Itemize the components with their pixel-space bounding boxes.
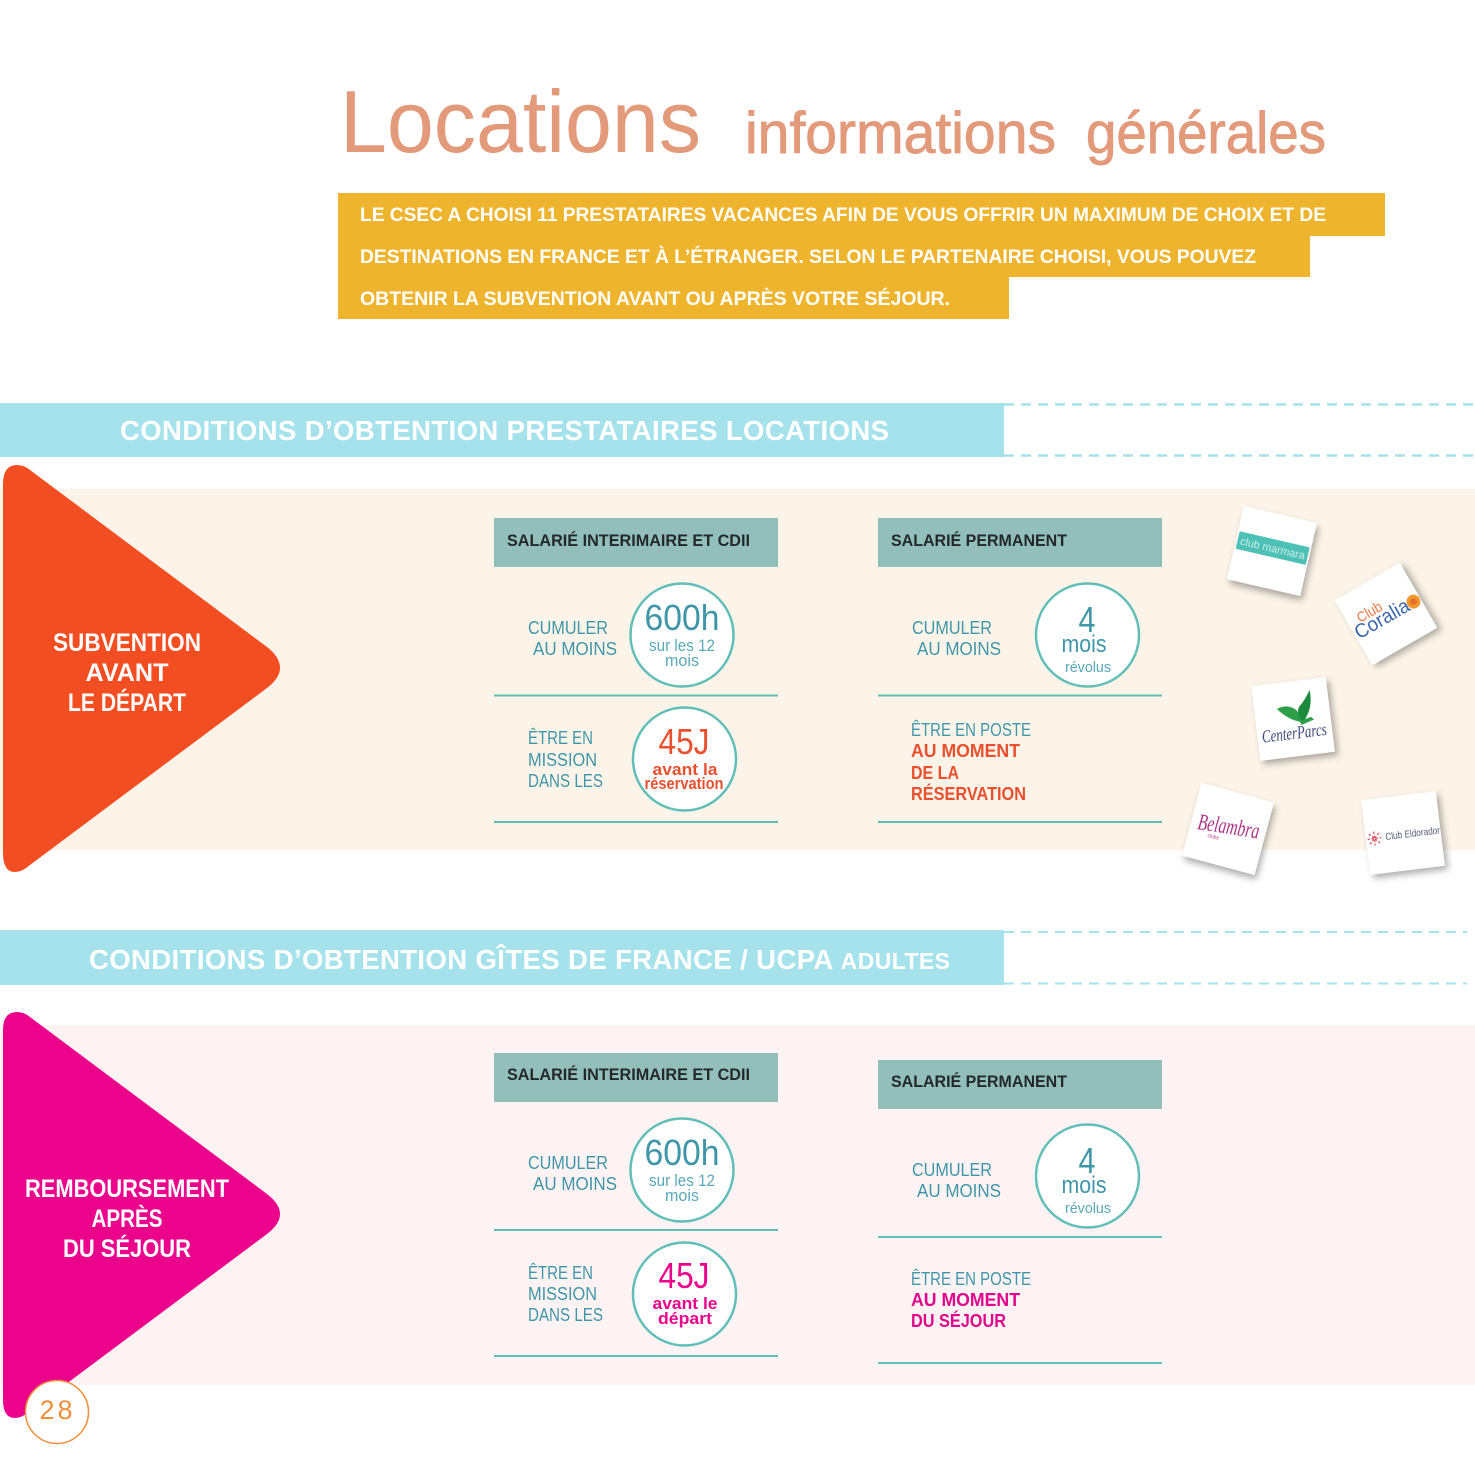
circle: 4 mois: révolus (1065, 1200, 1111, 1217)
circle: 600h (630, 584, 734, 686)
arrow: remboursement après du séjour: APRÈS (92, 1204, 162, 1233)
page number (26, 1380, 88, 1444)
column: salarié intérimaire et CDII (494, 1053, 778, 1356)
circle: 4 mois (1036, 584, 1139, 686)
circle: 45J: avant le (652, 1294, 718, 1313)
condition: cumuler (528, 618, 617, 659)
title: générales (1086, 101, 1326, 166)
column: salarié intérimaire et CDII (494, 518, 778, 822)
circle: 45J: 45J (658, 721, 710, 762)
arrow: remboursement après du séjour (3, 1012, 280, 1418)
circle: 45J: départ (658, 1309, 712, 1328)
logo card: club marmara (1227, 506, 1317, 596)
condition: poste (911, 1269, 1031, 1331)
page number: 28 (40, 1395, 72, 1425)
condition: poste: ÊTRE EN POSTE (911, 720, 1031, 740)
intro banner (338, 193, 1385, 319)
condition: mission: DANS LES (528, 771, 603, 791)
condition: mission: MISSION (528, 750, 597, 770)
condition: cumuler: AU MOINS (917, 1181, 1001, 1201)
condition: poste: AU MOMENT (911, 1290, 1020, 1310)
circle: 4 mois: révolus (1065, 659, 1111, 676)
condition: cumuler: CUMULER (912, 618, 992, 638)
condition: cumuler: AU MOINS (533, 1174, 617, 1194)
logo card: club coralia: Club (1354, 598, 1386, 627)
condition: poste: AU MOMENT (911, 741, 1020, 761)
condition: cumuler (912, 618, 1001, 659)
circle: 4 mois: mois (1062, 1172, 1106, 1199)
logo card: belambra: Belambra (1196, 809, 1261, 844)
column header: SALARIÉ INTERIMAIRE ET CDII (507, 531, 750, 550)
condition: cumuler (528, 1153, 617, 1194)
arrow: subvention avant le départ: SUBVENTION (53, 629, 201, 657)
condition: poste (911, 720, 1031, 804)
logo card: belambra (1182, 783, 1274, 875)
arrow: subvention avant le départ: LE DÉPART (68, 688, 186, 717)
column header: SALARIÉ INTERIMAIRE ET CDII (507, 1065, 750, 1084)
section heading: gîtes de france / ucpa: CONDITIONS D’OBTENTION GÎTES DE FRANCE / UCPA ADULTES (89, 944, 950, 975)
circle: 600h (630, 1118, 734, 1222)
condition: mission: ÊTRE EN (528, 728, 593, 748)
column: salarié permanent (878, 518, 1162, 822)
column header (494, 1053, 778, 1102)
column header (494, 518, 778, 567)
section heading: prestataires locations: CONDITIONS D’OBTENTION PRESTATAIRES LOCATIONS (120, 415, 889, 446)
arrow: subvention avant le départ: AVANT (86, 659, 168, 687)
column: salarié permanent (878, 1060, 1162, 1363)
panel: subvention avant le départ (0, 489, 1475, 850)
condition: poste: RÉSERVATION (911, 783, 1026, 804)
arrow: subvention avant le départ (3, 465, 280, 872)
logo card: center parcs: CenterParcs (1261, 719, 1328, 747)
circle: 4 mois: mois (1062, 631, 1106, 658)
condition: poste: DE LA (911, 763, 959, 783)
condition: cumuler: AU MOINS (917, 639, 1001, 659)
condition: mission: DANS LES (528, 1305, 603, 1325)
circle: 45J: avant la (652, 760, 718, 779)
circle: 600h: mois (665, 1186, 699, 1205)
title (340, 72, 1326, 171)
column header (878, 518, 1162, 567)
column header (878, 1060, 1162, 1109)
column header: SALARIÉ PERMANENT (891, 1072, 1068, 1091)
circle: 600h: sur les 12 (649, 636, 715, 655)
arrow: remboursement après du séjour: DU SÉJOUR (63, 1234, 191, 1263)
condition: poste: DU SÉJOUR (911, 1310, 1006, 1331)
condition: cumuler: CUMULER (528, 1153, 608, 1173)
condition: cumuler (912, 1160, 1001, 1201)
circle: 600h: 600h (644, 1132, 720, 1173)
circle: 45J (633, 1242, 736, 1346)
section heading: gîtes de france / ucpa (0, 930, 1467, 985)
condition: cumuler: CUMULER (912, 1160, 992, 1180)
logo card: club coralia (1335, 563, 1437, 665)
condition: mission (528, 728, 603, 791)
circle: 45J: réservation (644, 774, 724, 793)
circle: 600h: mois (665, 651, 699, 670)
condition: cumuler: CUMULER (528, 618, 608, 638)
condition: poste: ÊTRE EN POSTE (911, 1269, 1031, 1289)
logo card: belambra: clubs (1207, 833, 1220, 842)
logo card: club eldorador: Club Eldorador (1385, 824, 1441, 843)
arrow: remboursement après du séjour: REMBOURSEMENT (25, 1175, 229, 1203)
circle: 4 mois: 4 (1078, 1140, 1096, 1181)
condition: mission (528, 1263, 603, 1325)
circle: 4 mois: 4 (1078, 599, 1096, 640)
logo card: club eldorador (1361, 791, 1445, 875)
section heading: prestataires locations (0, 403, 1475, 457)
condition: mission: ÊTRE EN (528, 1263, 593, 1283)
logo card: center parcs (1251, 677, 1335, 761)
column header: SALARIÉ PERMANENT (891, 531, 1068, 550)
condition: cumuler: AU MOINS (533, 639, 617, 659)
logo card: club marmara: club marmara (1239, 536, 1307, 563)
circle: 600h: 600h (644, 597, 720, 638)
title: Locations (340, 72, 701, 171)
title: informations (745, 101, 1056, 166)
condition: mission: MISSION (528, 1284, 597, 1304)
panel: remboursement après le séjour (0, 1025, 1475, 1385)
circle: 45J: 45J (658, 1255, 710, 1296)
intro banner: LE CSEC A CHOISI 11 PRESTATAIRES VACANCES AFIN DE VOUS OFFRIR UN MAXIMUM DE CHOIX ET DE (360, 204, 1326, 226)
circle: 45J (633, 708, 736, 810)
intro banner: DESTINATIONS EN FRANCE ET À L’ÉTRANGER. SELON LE PARTENAIRE CHOISI, VOUS POUVEZ (360, 245, 1256, 268)
circle: 4 mois (1036, 1124, 1139, 1228)
circle: 600h: sur les 12 (649, 1171, 715, 1190)
intro banner: OBTENIR LA SUBVENTION AVANT OU APRÈS VOTRE SÉJOUR. (360, 287, 950, 310)
logo card: club coralia: Coralia (1351, 595, 1415, 644)
